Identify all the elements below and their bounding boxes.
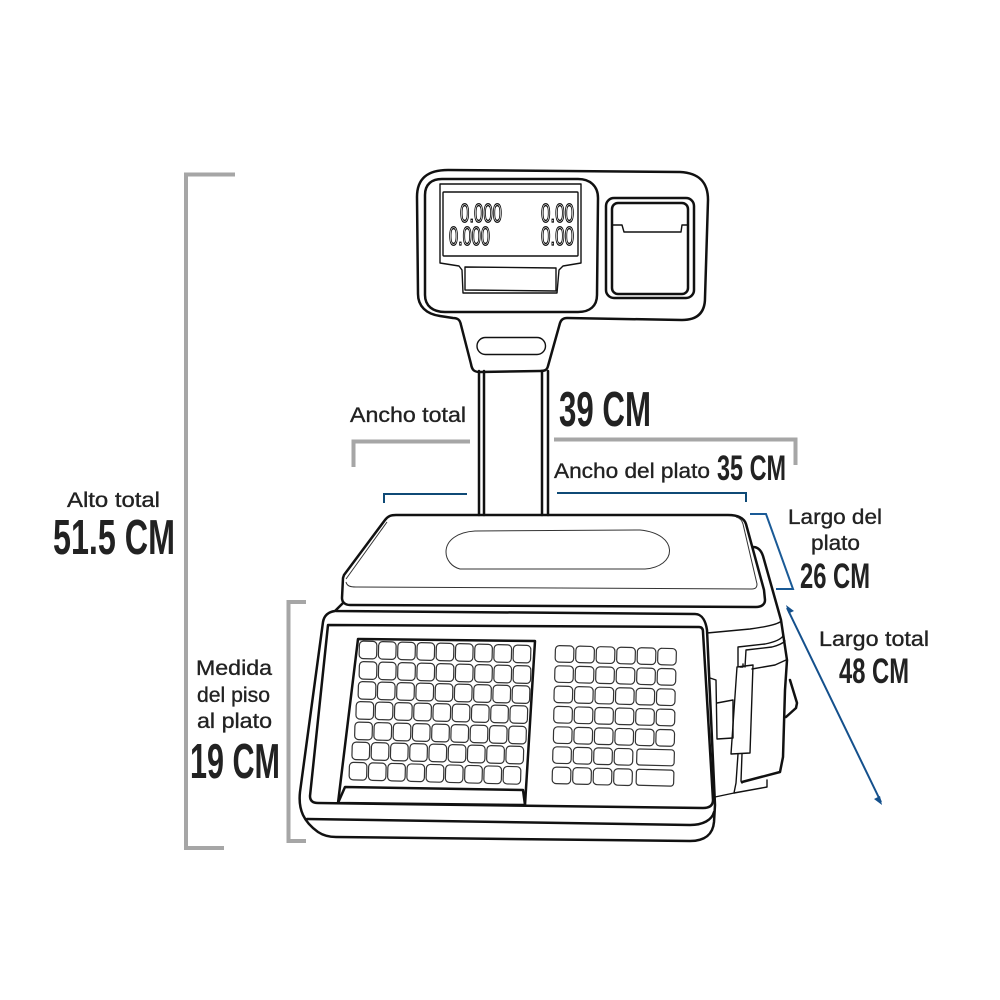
label: floor to platter xyxy=(190,657,280,789)
label: platter depth: plato xyxy=(811,532,860,555)
side knob xyxy=(786,680,797,717)
pole xyxy=(479,371,548,515)
second display window xyxy=(465,267,556,291)
label: total height: 51.5 CM xyxy=(53,511,175,565)
label: floor to platter: al plato xyxy=(197,710,272,733)
neck badge xyxy=(477,338,546,354)
label: platter width xyxy=(554,449,786,488)
keypad tray xyxy=(338,787,525,805)
label: platter depth: Largo del xyxy=(788,506,882,529)
LCD digits: 0.000 xyxy=(449,221,490,251)
label: floor to platter: Medida xyxy=(196,657,272,680)
illustration: price computing scale xyxy=(300,170,797,841)
LCD screen xyxy=(443,192,578,256)
bracket: platter depth xyxy=(750,514,793,589)
label: total height xyxy=(53,489,175,565)
LCD digits xyxy=(449,198,574,251)
panel: display bezel xyxy=(425,179,598,312)
weighing platter xyxy=(342,515,765,607)
label: total depth: Largo total xyxy=(819,628,929,651)
label: total depth xyxy=(819,628,929,691)
platter recess xyxy=(446,530,670,569)
arrow: total depth xyxy=(786,605,882,805)
label: total width: 39 CM xyxy=(559,383,651,437)
bracket: total width xyxy=(354,440,796,467)
display head xyxy=(417,170,708,372)
label: total depth: 48 CM xyxy=(839,652,909,691)
label: platter width: Ancho del plato xyxy=(554,460,710,483)
side tape strip xyxy=(731,665,753,754)
label: total width xyxy=(350,383,651,437)
LCD digits: 0.00 xyxy=(541,198,574,228)
printer inner xyxy=(612,203,688,294)
bracket: total height xyxy=(186,174,235,848)
label: floor to platter: del piso xyxy=(197,684,270,707)
side bracket xyxy=(710,678,733,739)
right keypad keys xyxy=(552,646,676,787)
label: platter width: 35 CM xyxy=(717,449,786,488)
LCD digits: 0.000 xyxy=(460,198,502,228)
label: total height: Alto total xyxy=(67,489,160,512)
label: floor to platter: 19 CM xyxy=(190,735,280,789)
bracket: platter width xyxy=(384,493,746,503)
label: platter depth xyxy=(788,506,882,596)
label: total width: Ancho total xyxy=(350,404,466,427)
panel: LCD frame xyxy=(440,184,581,293)
left keypad keys xyxy=(349,641,531,784)
LCD digits: 0.00 xyxy=(541,221,574,251)
base body xyxy=(300,603,715,841)
panel: printer slot xyxy=(606,198,694,298)
label: platter depth: 26 CM xyxy=(800,557,870,596)
keyboard bezel xyxy=(310,625,713,808)
left keypad frame xyxy=(338,639,535,805)
body side xyxy=(707,547,797,797)
bracket: floor to platter xyxy=(288,602,306,841)
